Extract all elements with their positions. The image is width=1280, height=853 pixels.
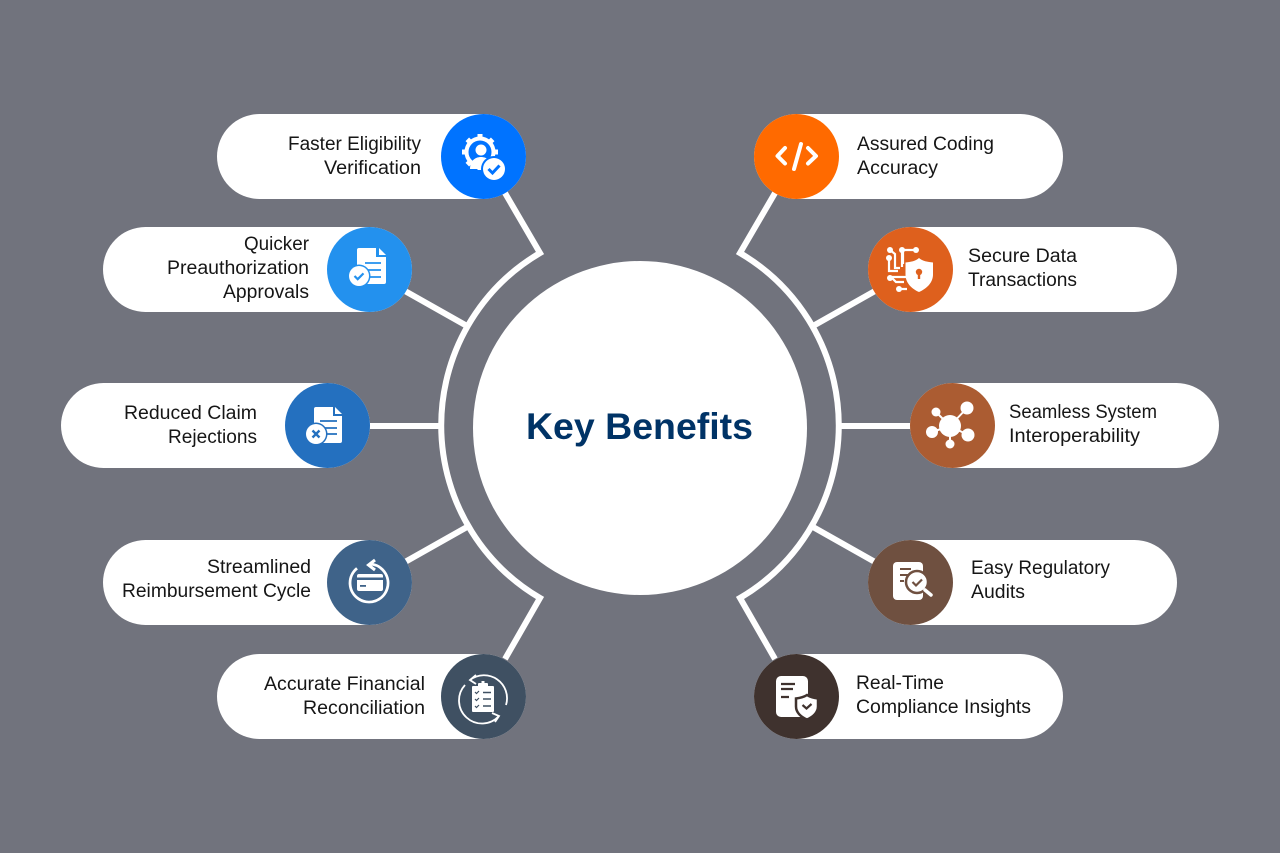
icon: document with cross [304,407,342,446]
benefit: Seamless System Interoperability: Seamless System [1009,402,1157,423]
benefit: Reduced Claim Rejections: Rejections [168,427,257,448]
benefit: Easy Regulatory Audits: Easy Regulatory [971,558,1110,579]
benefit: Assured Coding Accuracy: Accuracy [857,158,939,179]
benefit: Assured Coding Accuracy [754,114,1063,199]
icon: audit document with magnifier [893,562,931,600]
benefit: Secure Data Transactions: Secure Data [968,246,1077,267]
benefit: Streamlined Reimbursement Cycle: Reimbursement Cycle [122,581,311,602]
title: Key Benefits [526,406,753,447]
benefit: Easy Regulatory Audits [868,540,1177,625]
benefit: Assured Coding Accuracy: Assured Coding [857,134,994,155]
benefit: Reduced Claim Rejections [61,383,370,468]
benefit: Secure Data Transactions: Transactions [968,270,1077,291]
icon: card with circular arrow [350,560,388,602]
benefit: Quicker Preauthorization Approvals: Approvals [223,282,309,303]
benefit: Streamlined Reimbursement Cycle [103,540,412,625]
icon: document with shield [776,676,818,720]
benefit: Real-Time Compliance Insights: Real-Time [856,673,944,694]
icon: gear with person and check [462,134,507,182]
benefit: Real-Time Compliance Insights: Compliance Insights [856,697,1031,718]
central circle with title [473,261,807,595]
benefit: Accurate Financial Reconciliation: Reconciliation [303,698,425,719]
benefit: Quicker Preauthorization Approvals: Preauthorization [167,258,309,279]
benefit: Faster Eligibility Verification: Faster Eligibility [288,134,421,155]
connectors: right arc and spokes [740,193,910,659]
icon: network nodes [926,402,974,448]
benefit: Real-Time Compliance Insights [754,654,1063,739]
benefit: Easy Regulatory Audits: Audits [971,582,1025,603]
benefit: Quicker Preauthorization Approvals: Quicker [244,234,310,255]
icon: code brackets [778,144,816,169]
benefit: Seamless System Interoperability [910,383,1219,468]
benefit: Secure Data Transactions [868,227,1177,312]
connectors: left arc and spokes [370,193,540,659]
benefit: Reduced Claim Rejections: Reduced Claim [124,403,257,424]
benefit: Faster Eligibility Verification [217,114,526,199]
icon: clipboard with cycle arrows [459,675,507,723]
benefit: Streamlined Reimbursement Cycle: Streamlined [207,557,311,578]
benefit: Seamless System Interoperability: Interoperability [1009,426,1141,447]
benefit: Accurate Financial Reconciliation: Accurate Financial [264,674,425,695]
benefit: Quicker Preauthorization Approvals [103,227,412,312]
benefit: Accurate Financial Reconciliation [217,654,526,739]
icon: document with check [348,248,386,288]
benefit: Faster Eligibility Verification: Verification [324,158,421,179]
icon: circuit shield [886,247,933,292]
